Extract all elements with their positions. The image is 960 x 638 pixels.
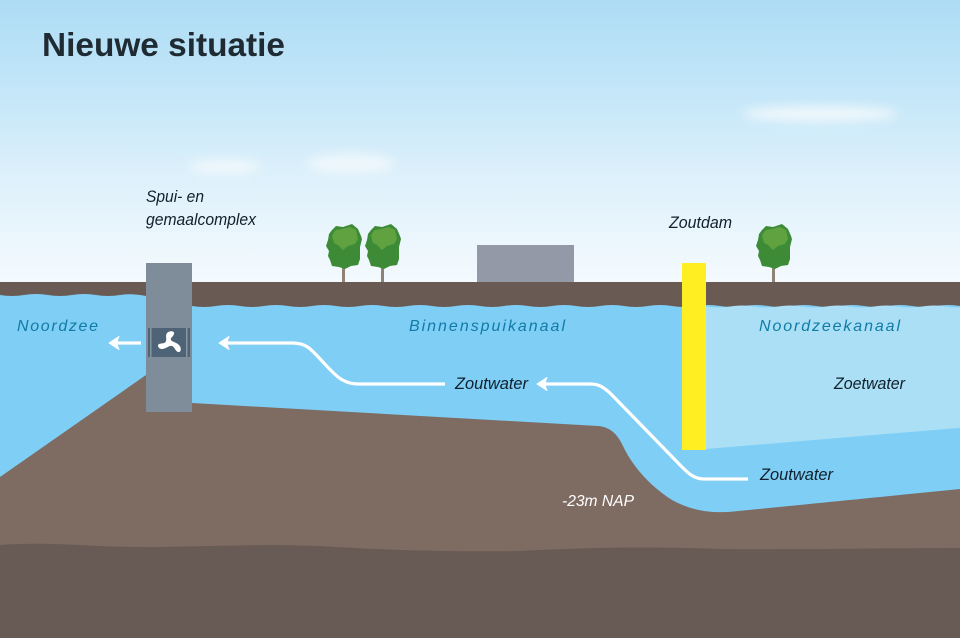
label: Binnenspuikanaal: Binnenspuikanaal (409, 318, 565, 335)
clouds (189, 106, 898, 175)
label: Noordzee: Noordzee (17, 318, 98, 335)
water: Noordzeekanaal fresh water (706, 306, 960, 449)
building: grey block (477, 245, 574, 282)
dark ground strip (0, 282, 960, 322)
water: Binnenspuikanaal and salt layer (192, 305, 960, 520)
yellow salt dam (682, 263, 706, 450)
arrow: out to Noordzee (109, 336, 141, 350)
upper seabed (0, 375, 960, 560)
label: Zoutwater right: Zoutwater (759, 465, 834, 484)
label: Spui- en gemaalcomplex (146, 187, 256, 229)
sky background (0, 0, 960, 283)
icon: tree 2 (365, 224, 401, 282)
water: Noordzee (0, 294, 146, 500)
label: Noordzeekanaal: Noordzeekanaal (759, 318, 900, 335)
label: Zoutdam: Zoutdam (668, 213, 732, 232)
label: Zoutwater middle: Zoutwater (454, 374, 529, 393)
label: depth -23m NAP: -23m NAP (562, 493, 634, 510)
icon: tree 3 (756, 224, 792, 282)
label: Zoetwater: Zoetwater (833, 374, 906, 393)
arrow: under the salt dam (537, 378, 748, 479)
label: Spui- en gemaalcomplex: gemaalcomplex (146, 210, 256, 229)
icon: tree 1 (326, 224, 362, 282)
arrow: through Binnenspuikanaal (219, 336, 445, 384)
lower ground layer (0, 544, 960, 638)
pump band (148, 328, 190, 357)
label: Spui- en gemaalcomplex: Spui- en (146, 187, 204, 206)
building: Spui- en gemaalcomplex (146, 263, 192, 412)
title: Nieuwe situatie (42, 26, 285, 63)
